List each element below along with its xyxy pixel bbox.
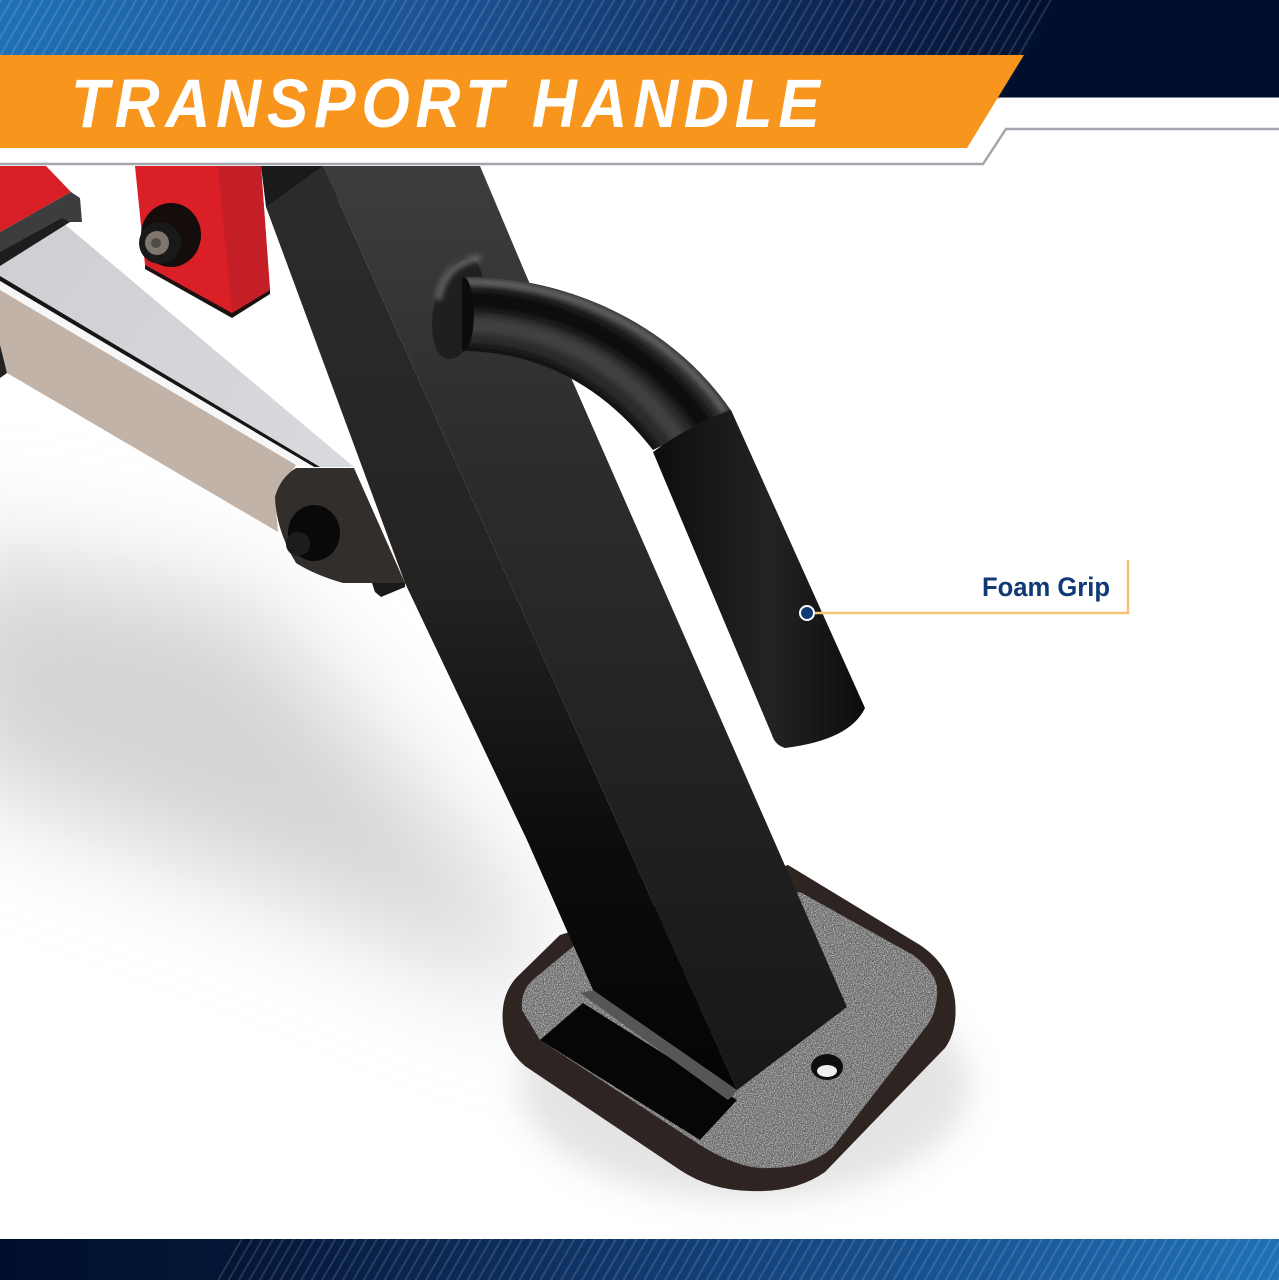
title: TRANSPORT HANDLE	[71, 65, 822, 142]
callout: foam grip	[800, 560, 1128, 620]
photo: lower bolt bracket	[275, 468, 405, 597]
foot rubber edge	[503, 865, 956, 1191]
handle weld collar	[424, 252, 492, 364]
bottom band	[0, 1239, 1279, 1280]
photo: red bracket centre	[135, 166, 270, 318]
photo: silver crossbar	[0, 222, 354, 532]
title banner	[0, 55, 1024, 148]
foot gritty plate	[522, 892, 937, 1168]
photo: red bracket left	[0, 166, 82, 266]
photo: main upright post	[261, 166, 847, 1090]
icon: red bracket bolt	[139, 203, 201, 267]
photo: metal handle	[432, 253, 732, 450]
callout label: Foam Grip	[982, 572, 1110, 602]
weld strip	[580, 990, 738, 1100]
top banner background	[0, 0, 1279, 98]
photo: foot plate	[503, 865, 956, 1191]
photo: foam grip	[653, 410, 865, 748]
post shadow on plate	[540, 1003, 737, 1140]
mounting hole	[811, 1054, 843, 1080]
floor shadow	[0, 540, 970, 1200]
handle tube	[462, 277, 732, 450]
header strip under banner	[0, 98, 1279, 166]
